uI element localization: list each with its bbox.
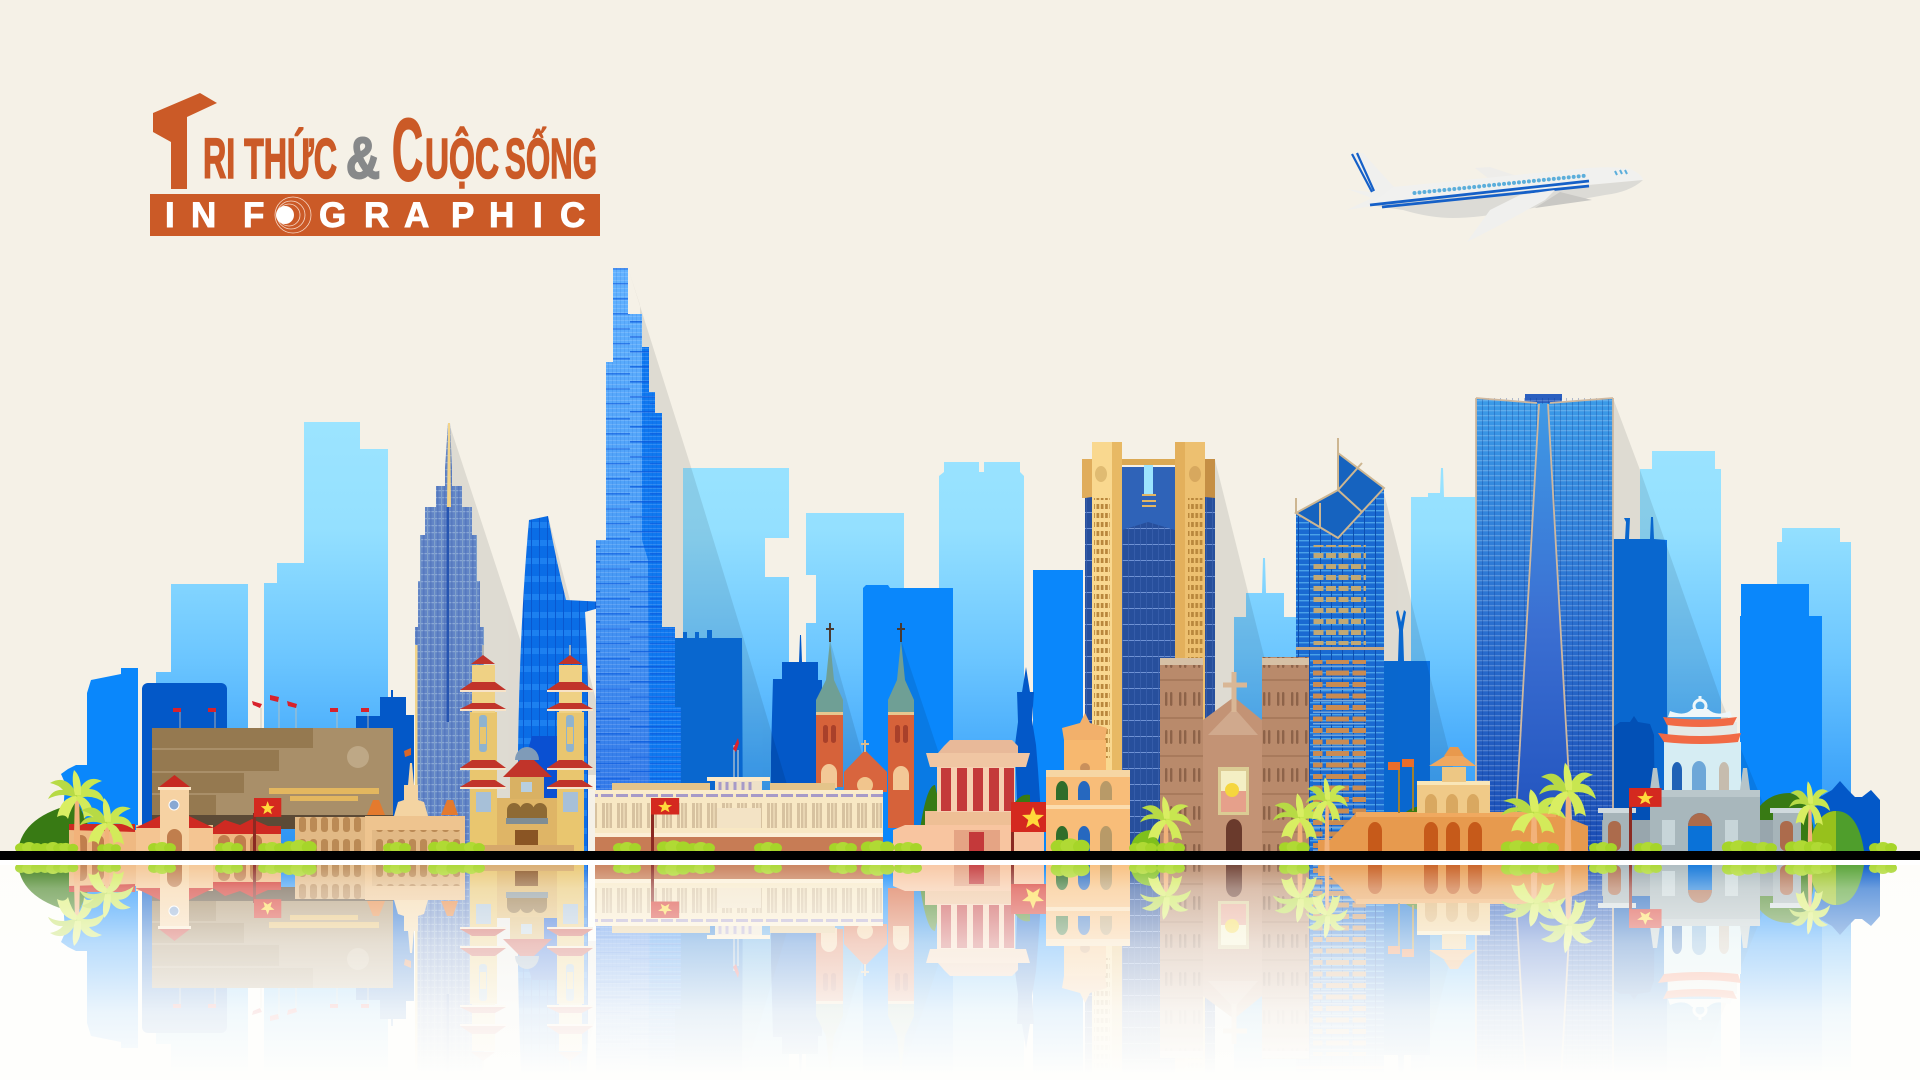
upper roof bbox=[1429, 756, 1476, 766]
tower trim bbox=[816, 712, 914, 715]
pavilion arch centre bbox=[1692, 761, 1706, 790]
wall bbox=[1602, 820, 1798, 851]
central hall bbox=[497, 798, 557, 851]
left cross bbox=[826, 623, 834, 642]
oval bbox=[347, 746, 369, 768]
flag: mausoleum bbox=[1011, 802, 1055, 851]
reflection background bbox=[0, 860, 1920, 1080]
dark blue silhouettes bbox=[142, 635, 1880, 851]
building: Independence Palace bbox=[595, 777, 883, 851]
diamond crown bbox=[1296, 453, 1384, 538]
building: St Joseph Cathedral bbox=[1160, 657, 1309, 851]
right tower bbox=[888, 713, 914, 828]
flag: temple bbox=[1629, 788, 1662, 851]
cockpit bbox=[1615, 170, 1627, 175]
pavilion arches bbox=[1672, 762, 1682, 790]
centre balcony bbox=[717, 808, 761, 828]
beige fins bbox=[1476, 398, 1613, 851]
gold bars bbox=[269, 788, 379, 794]
central taper bbox=[1515, 404, 1572, 851]
clock bbox=[169, 800, 179, 810]
fine grid bbox=[596, 268, 681, 851]
logo name: Cuộc Sống: SỐNG bbox=[505, 126, 597, 191]
centre cross bbox=[1223, 672, 1247, 712]
building: Ho Chi Minh Mausoleum bbox=[893, 740, 1044, 851]
gable bbox=[844, 750, 887, 792]
white gap bbox=[0, 860, 1920, 865]
darker blue buildings bbox=[675, 517, 1667, 851]
base bbox=[1318, 813, 1588, 851]
top bar bbox=[1122, 459, 1175, 465]
panel art bbox=[1221, 771, 1246, 812]
flag poles: palace bbox=[733, 738, 739, 777]
logo name: Cuộc Sống: UỘC bbox=[425, 126, 499, 191]
central roof bbox=[135, 816, 214, 828]
gate cornice bbox=[1650, 790, 1760, 797]
dark stripes bbox=[152, 728, 313, 815]
flag: left market bbox=[253, 798, 281, 851]
turret left bbox=[367, 800, 385, 815]
gate block bbox=[1417, 782, 1490, 813]
upper pavilion bbox=[1664, 742, 1741, 790]
left wing bbox=[1082, 459, 1092, 498]
top roof bbox=[1444, 747, 1464, 756]
logo name: Tri Thức: RI THỨC bbox=[203, 127, 337, 191]
panel sky bbox=[1221, 771, 1246, 791]
arches bbox=[507, 803, 547, 818]
black ground line bbox=[0, 851, 1920, 860]
pavilion arch right bbox=[1719, 762, 1729, 790]
banner O icon bbox=[275, 197, 311, 233]
arched windows bbox=[1056, 781, 1112, 851]
upper blue section bbox=[1122, 467, 1175, 530]
center tower bbox=[394, 763, 428, 816]
hall arches bbox=[372, 830, 460, 851]
right tower bbox=[1262, 657, 1309, 851]
tower: Bitexco bbox=[518, 516, 606, 851]
arches bbox=[75, 835, 262, 851]
left tower bbox=[816, 713, 843, 787]
gable cross bbox=[861, 740, 869, 752]
right tower bbox=[547, 645, 593, 851]
finial bbox=[1698, 696, 1702, 699]
mid blue buildings bbox=[61, 570, 1822, 851]
roof top bbox=[938, 740, 1018, 753]
light notch bbox=[1144, 462, 1153, 494]
background bbox=[0, 0, 1920, 851]
right spire bbox=[888, 640, 914, 713]
base arches bbox=[1368, 822, 1482, 851]
right cross bbox=[897, 623, 905, 642]
red bays bbox=[941, 768, 1014, 811]
top bbox=[1062, 713, 1107, 740]
lower tint bbox=[1296, 647, 1384, 650]
water reflection of the skyline bbox=[0, 860, 1920, 1080]
skyline scene bbox=[15, 268, 1897, 881]
panel sun bbox=[1225, 783, 1239, 797]
reflection fade bbox=[0, 863, 1920, 1080]
tower cap bbox=[158, 787, 191, 790]
upper storey bbox=[1064, 740, 1106, 772]
rose bbox=[857, 777, 873, 793]
gate arch bbox=[1688, 813, 1712, 851]
right pier bbox=[1770, 808, 1804, 851]
red roofs bbox=[69, 824, 135, 832]
building: brown museum block bbox=[152, 695, 393, 829]
mid roof bbox=[503, 760, 552, 777]
left spire bbox=[816, 640, 843, 713]
tower: gold twin-column tower bbox=[1082, 442, 1215, 851]
airplane bbox=[1345, 153, 1643, 242]
column block bbox=[937, 767, 1015, 812]
door bbox=[1226, 819, 1242, 851]
roof bbox=[926, 753, 1030, 767]
gable bbox=[1208, 708, 1258, 735]
vents bbox=[1142, 495, 1156, 506]
banner text: INF O GRAPHIC bbox=[165, 196, 585, 235]
logo ampersand: & bbox=[346, 126, 380, 191]
gate arches bbox=[1425, 794, 1479, 813]
left gold column bbox=[1092, 442, 1122, 772]
clock tower bbox=[160, 788, 189, 851]
logo: Tri Thức & Cuộc Sống Infographic bbox=[150, 93, 600, 236]
middle storey bbox=[1668, 722, 1737, 736]
upper block bbox=[1442, 767, 1466, 782]
rail bbox=[1417, 781, 1490, 785]
citadel flags bbox=[1388, 759, 1414, 813]
clock bbox=[1080, 763, 1090, 773]
turret right bbox=[441, 800, 458, 815]
pillars bbox=[1650, 768, 1750, 790]
tower arches bbox=[821, 764, 909, 790]
tower windows bbox=[823, 725, 908, 743]
cornice bbox=[1046, 805, 1130, 809]
tower: big blue tower bbox=[1476, 394, 1613, 851]
hill by St Joseph bbox=[1130, 830, 1165, 851]
plinth bbox=[925, 811, 1023, 825]
roof flags bbox=[173, 695, 369, 712]
base bbox=[484, 845, 574, 851]
central hall bbox=[136, 825, 213, 851]
door inner bbox=[969, 832, 984, 851]
far wing bbox=[1475, 167, 1520, 182]
mid block bbox=[510, 777, 544, 799]
small flag bbox=[404, 748, 411, 757]
lower window rows bbox=[1313, 660, 1366, 851]
windows bbox=[1414, 176, 1587, 193]
right wing bbox=[1205, 459, 1215, 498]
tower: Landmark 81 style stepped tower bbox=[415, 423, 484, 851]
column windows bbox=[1094, 498, 1110, 758]
lower dark panel bbox=[522, 736, 584, 851]
tower: tall Landmark tower bbox=[596, 268, 681, 851]
upper red roof bbox=[1663, 717, 1737, 727]
right gold column bbox=[1175, 442, 1205, 772]
oval ornaments bbox=[1095, 466, 1107, 482]
centre panel bbox=[1218, 767, 1249, 815]
body stripe lower bbox=[1382, 186, 1589, 207]
logo mark: T bbox=[153, 93, 217, 189]
green hills bbox=[18, 785, 1815, 851]
gold spire bbox=[447, 423, 451, 507]
engine shading bbox=[1535, 192, 1592, 208]
windows bbox=[521, 782, 532, 792]
centre nave bbox=[1203, 697, 1262, 851]
tail bbox=[1345, 153, 1400, 210]
crown frame bbox=[1296, 438, 1384, 538]
building: Temple of Literature bbox=[1598, 696, 1804, 851]
lower red roof bbox=[1658, 733, 1741, 744]
dome bbox=[515, 747, 539, 760]
left pier bbox=[1598, 808, 1636, 851]
base bbox=[595, 837, 883, 851]
hill: round bush right bbox=[1808, 811, 1864, 851]
building: Saigon post orange tower bbox=[1046, 713, 1130, 851]
tower tops bbox=[1160, 658, 1309, 665]
base top bbox=[1356, 812, 1556, 817]
logo: Tri Thức & Cuộc Sống Infographic: C bbox=[392, 100, 423, 199]
flag: palace bbox=[651, 798, 679, 851]
tower roof bbox=[159, 775, 190, 787]
building: City Hall bbox=[295, 748, 465, 851]
logo banner bbox=[150, 194, 600, 236]
gate bbox=[1650, 790, 1760, 851]
building: Cao Dai temple bbox=[460, 645, 593, 851]
fuselage upper bbox=[1370, 167, 1643, 205]
bushes along the ground bbox=[15, 838, 1897, 854]
crown cover bbox=[1296, 488, 1337, 512]
arch top bbox=[1688, 813, 1712, 826]
tower: diamond-top building bbox=[1296, 438, 1384, 851]
upper window rows bbox=[1313, 545, 1366, 645]
building: Notre-Dame Cathedral bbox=[816, 623, 914, 828]
balcony bbox=[506, 818, 548, 824]
balcony bbox=[1046, 770, 1130, 777]
palm trees bbox=[48, 763, 1830, 881]
entry bbox=[515, 830, 538, 845]
body stripes bbox=[1370, 181, 1589, 205]
base steps bbox=[893, 825, 1044, 851]
tail stripes bbox=[1352, 153, 1374, 192]
left tower bbox=[1160, 662, 1203, 851]
long shadows bbox=[449, 268, 1770, 850]
building: Ben Thanh market bbox=[69, 775, 281, 851]
building: Hanoi citadel bbox=[1318, 747, 1588, 851]
door bbox=[954, 830, 1000, 851]
door bbox=[167, 829, 182, 851]
darker face bbox=[642, 347, 681, 851]
flag poles bbox=[180, 700, 368, 728]
near wing bbox=[1467, 190, 1555, 242]
band lines bbox=[596, 268, 681, 851]
central mast bbox=[446, 507, 449, 722]
background light blue buildings bbox=[156, 422, 1851, 851]
left tower bbox=[460, 645, 506, 851]
gate panels bbox=[1662, 820, 1738, 845]
top ornament bbox=[1694, 700, 1706, 712]
fuselage lower bbox=[1370, 180, 1643, 218]
ridge bbox=[1668, 709, 1732, 717]
gold edge bbox=[415, 645, 418, 815]
